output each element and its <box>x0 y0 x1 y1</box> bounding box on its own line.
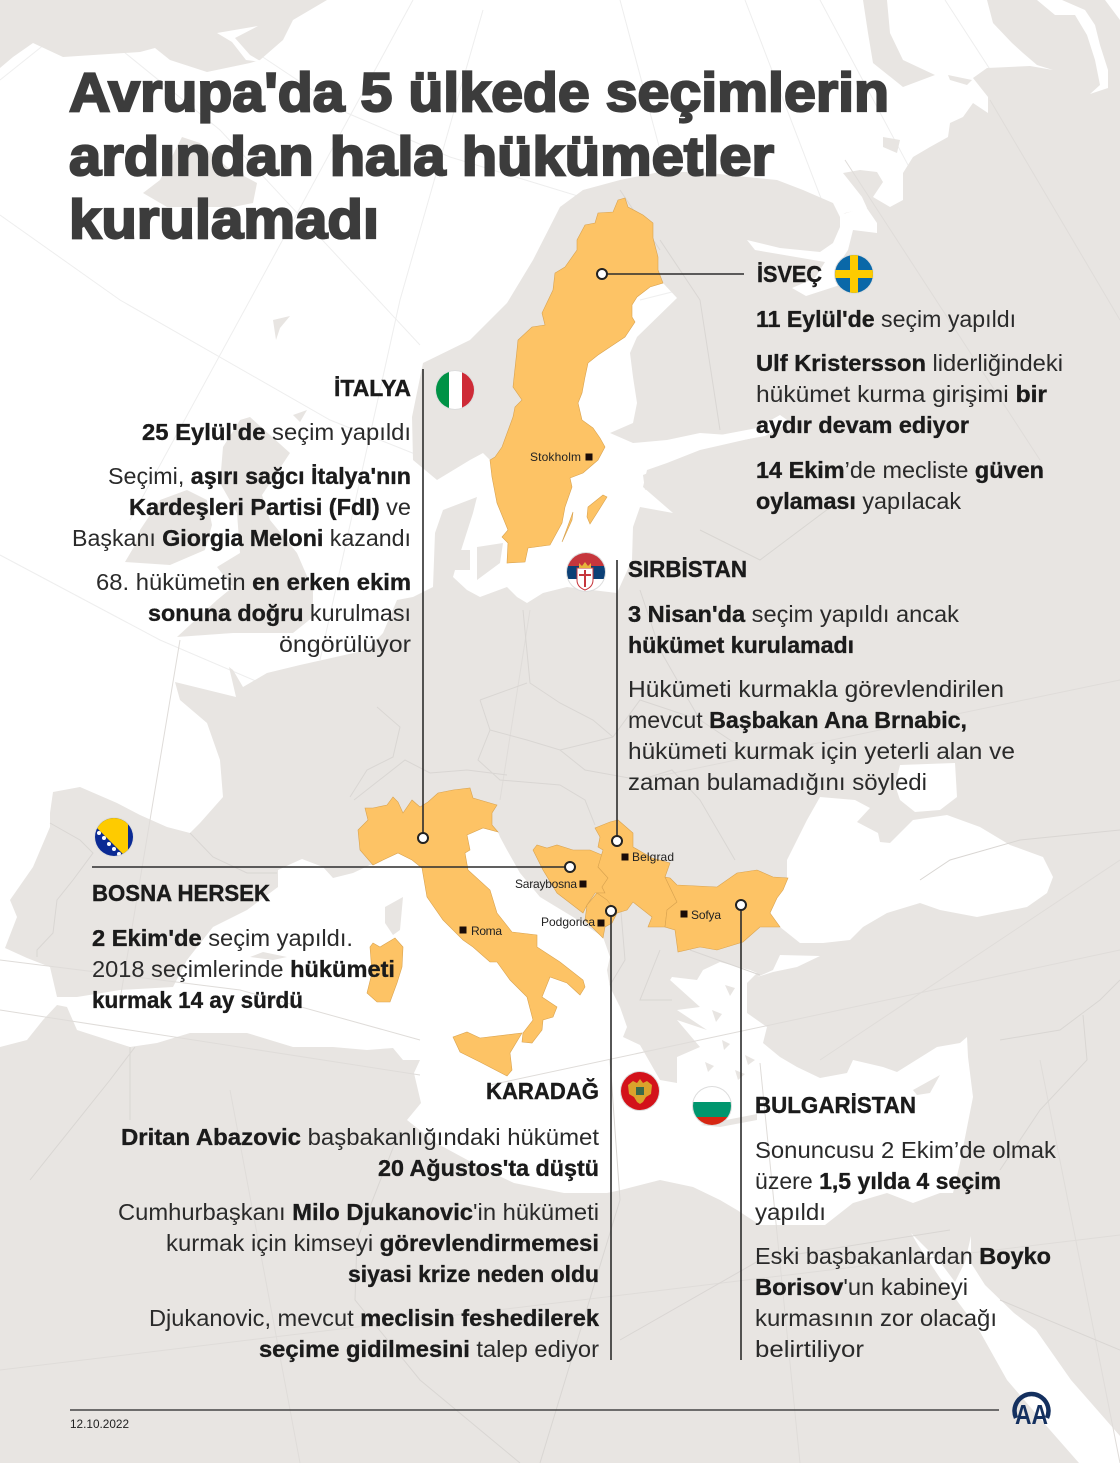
capital labels <box>460 450 721 938</box>
text block: Başkanı Giorgia Meloni kazandı <box>72 525 411 551</box>
title: Avrupa'da 5 ülkede seçimlerin <box>69 61 889 123</box>
text block: seçime gidilmesini talep ediyor <box>259 1336 599 1362</box>
land: Ireland <box>125 490 212 565</box>
land: northern isles <box>273 316 307 422</box>
icon: Italy flag <box>435 370 475 410</box>
text block: 11 Eylül'de seçim yapıldı <box>756 306 1016 332</box>
text block: Dritan Abazovic başbakanlığındaki hükümet <box>121 1124 600 1150</box>
text block: sonuna doğru kurulması <box>148 600 411 626</box>
text block: kurmak için kimseyi görevlendirmemesi <box>166 1230 599 1256</box>
panel: Bosna Hersek <box>87 817 395 1013</box>
text block: hükümet kurulamadı <box>628 632 854 658</box>
capital labels: Sofya <box>691 908 721 922</box>
capital labels: Podgorica <box>541 915 595 929</box>
connector: Bosnia and Herzegovina <box>92 862 575 872</box>
text block <box>72 419 411 657</box>
text block: siyasi krize neden oldu <box>348 1261 599 1287</box>
heading: Karadağ: KARADAĞ <box>486 1077 599 1104</box>
land: Arctic and Nordic islands <box>453 0 972 580</box>
title <box>69 61 889 250</box>
text block: Djukanovic, mevcut meclisin feshedilerek <box>149 1305 599 1331</box>
text block: 14 Ekim’de mecliste güven <box>756 457 1044 483</box>
text block: belirtiliyor <box>755 1336 864 1362</box>
heading: Bosna Hersek: BOSNA HERSEK <box>92 880 270 906</box>
country: Sweden <box>490 198 663 563</box>
land: Great Britain <box>177 417 313 637</box>
text block: zaman bulamadığını söyledi <box>628 769 927 795</box>
title: ardından hala hükümetler <box>69 125 774 187</box>
icon: Montenegro flag <box>620 1071 660 1111</box>
capital labels: Roma <box>471 924 502 938</box>
land: Iceland <box>143 137 257 207</box>
text block: hükümeti kurmak için yeterli alan ve <box>628 738 1015 764</box>
text block <box>92 925 395 1013</box>
text block: Hükümeti kurmakla görevlendirilen <box>628 676 1004 702</box>
text block: Eski başbakanlardan Boyko <box>755 1243 1051 1269</box>
heading: Bulgaristan: BULGARİSTAN <box>755 1092 916 1118</box>
capital labels: Belgrad <box>632 850 674 864</box>
connector: Italy <box>418 369 428 843</box>
land: Greenland <box>0 0 327 72</box>
text block: Seçimi, aşırı sağcı İtalya'nın <box>108 463 411 489</box>
panel: Bulgaristan <box>692 1086 1057 1362</box>
text block: 68. hükümetin en erken ekim <box>96 569 411 595</box>
connector: Montenegro <box>606 906 616 1360</box>
text block <box>628 601 1015 795</box>
icon: Bosnia and Herzegovina flag <box>94 817 134 857</box>
icon: Sweden flag <box>834 254 874 294</box>
country: Montenegro <box>585 893 617 938</box>
land: Mediterranean islands <box>250 897 940 1127</box>
country: Serbia <box>595 820 677 927</box>
capital labels: Saraybosna <box>515 877 577 891</box>
text block <box>755 1137 1057 1362</box>
text block <box>118 1124 600 1362</box>
panel: Karadağ <box>118 1071 660 1362</box>
heading: İtalya: İTALYA <box>334 375 411 401</box>
text block: öngörülüyor <box>279 631 411 657</box>
country: Bosnia and Herzegovina <box>533 845 608 913</box>
text block: 2 Ekim'de seçim yapıldı. <box>92 925 353 951</box>
text block: Borisov'un kabineyi <box>755 1274 968 1300</box>
text block: Sonuncusu 2 Ekim’de olmak <box>755 1137 1057 1163</box>
panel: Sırbistan <box>566 552 1015 795</box>
icon: AA logo: AA <box>1015 1399 1048 1430</box>
country: Bulgaria <box>665 870 788 952</box>
heading: Sırbistan: SIRBİSTAN <box>628 556 747 582</box>
icon: Serbia flag <box>566 552 606 593</box>
country: Italy <box>358 788 585 1076</box>
text block: kurmasının zor olacağı <box>755 1305 997 1331</box>
text block: oylaması yapılacak <box>756 488 962 514</box>
text block: Ulf Kristersson liderliğindeki <box>756 350 1063 376</box>
text block: üzere 1,5 yılda 4 seçim <box>755 1168 1001 1194</box>
text block: Cumhurbaşkanı Milo Djukanovic'in hükümeti <box>118 1199 599 1225</box>
text block: kurmak 14 ay sürdü <box>92 987 303 1013</box>
text block: Kardeşleri Partisi (FdI) ve <box>129 494 411 520</box>
text block <box>756 306 1063 514</box>
text block: mevcut Başbakan Ana Brnabic, <box>628 707 967 733</box>
connector: Bulgaria <box>736 900 746 1360</box>
panel: İsveç <box>756 254 1063 514</box>
title: kurulamadı <box>69 188 379 250</box>
text block: aydır devam ediyor <box>756 412 969 438</box>
text block: 3 Nisan'da seçim yapıldı ancak <box>628 601 960 627</box>
text block: hükümet kurma girişimi bir <box>756 381 1047 407</box>
text block: 25 Eylül'de seçim yapıldı <box>142 419 411 445</box>
icon: Bulgaria flag <box>692 1086 732 1126</box>
connector: Sweden <box>597 269 744 279</box>
panel: İtalya <box>72 370 475 657</box>
text block: 2018 seçimlerinde hükümeti <box>92 956 395 982</box>
date: 12.10.2022 <box>70 1417 129 1431</box>
footer <box>70 1394 1048 1431</box>
text block: yapıldı <box>755 1199 826 1225</box>
heading: İsveç: İSVEÇ <box>757 261 822 287</box>
capital labels: Stokholm <box>530 450 581 464</box>
connector: Serbia <box>612 560 622 846</box>
text block: 20 Ağustos'ta düştü <box>378 1155 599 1181</box>
